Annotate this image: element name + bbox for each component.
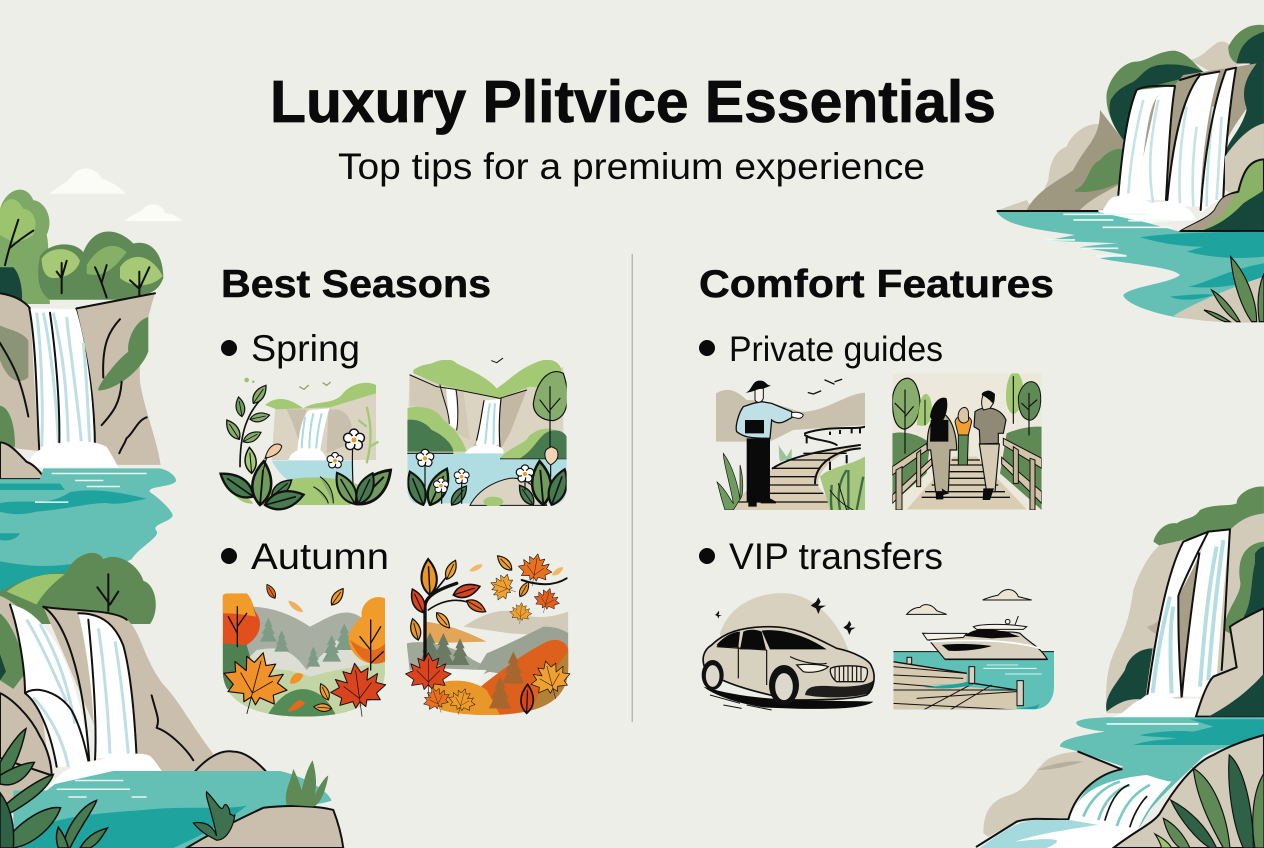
grass tuft left bbox=[286, 760, 328, 806]
right rocks bbox=[1225, 123, 1264, 197]
background rocks bbox=[1037, 124, 1120, 207]
list item: autumn: Autumn bbox=[251, 536, 389, 577]
lower cliff rock bbox=[0, 596, 268, 819]
waterfall rock bbox=[1167, 63, 1257, 193]
lower pool bbox=[13, 771, 332, 848]
foreground leaves bbox=[0, 729, 107, 848]
list item: vip transfers: VIP transfers bbox=[729, 536, 943, 577]
back rock bbox=[1106, 530, 1233, 713]
spring illustration one bbox=[216, 378, 398, 513]
lower waterfall bbox=[10, 605, 163, 786]
plant leaves bbox=[1204, 257, 1264, 322]
water plant bbox=[193, 792, 235, 840]
falls bbox=[1147, 532, 1208, 700]
private guide illustration bbox=[716, 379, 865, 510]
lake bbox=[0, 468, 176, 602]
dark shrub bbox=[1106, 648, 1153, 712]
scene: left waterfalls bbox=[0, 168, 343, 848]
spring illustration two bbox=[403, 358, 572, 509]
title: Luxury Plitvice Essentials bbox=[270, 69, 996, 135]
yacht and dock illustration bbox=[893, 590, 1054, 710]
autumn illustration one bbox=[222, 584, 386, 717]
group on boardwalk illustration bbox=[892, 372, 1042, 510]
right foreground bank bbox=[1181, 159, 1264, 231]
list item: private guides: Private guides bbox=[729, 330, 943, 369]
subtitle: Top tips for a premium experience bbox=[338, 146, 925, 187]
right rock bbox=[1197, 513, 1264, 717]
autumn illustration two bbox=[405, 551, 575, 718]
cliff green and sand bbox=[997, 200, 1033, 211]
trees upper left bbox=[0, 190, 163, 304]
upper cliff rock bbox=[0, 293, 161, 465]
illustrations: spring and autumn bbox=[215, 358, 575, 722]
lower cascade bbox=[1070, 775, 1172, 833]
sand and plant bbox=[1173, 277, 1264, 323]
canopy bbox=[1106, 51, 1203, 140]
foam bbox=[1112, 692, 1200, 717]
clouds bbox=[49, 168, 183, 221]
scene: bottom right waterfall bbox=[977, 486, 1264, 848]
right foreground bank bbox=[1113, 735, 1264, 848]
upper waterfall bbox=[29, 308, 118, 467]
heading: comfort features: Comfort Features bbox=[699, 263, 1054, 306]
plant leaves bbox=[1155, 755, 1264, 848]
river bbox=[1060, 717, 1264, 827]
divider bbox=[632, 254, 633, 722]
right foreground rock bbox=[1196, 608, 1264, 717]
luxury car illustration bbox=[702, 593, 874, 710]
list item: spring: Spring bbox=[251, 328, 360, 369]
upper left boulder bbox=[0, 442, 44, 479]
foam bbox=[1098, 195, 1197, 223]
rock bottom right bbox=[187, 806, 343, 848]
river bbox=[997, 212, 1264, 319]
canopy top bbox=[1153, 486, 1264, 546]
mid rock bbox=[983, 752, 1122, 837]
illustrations: comfort features bbox=[702, 372, 1054, 710]
heading: best seasons: Best Seasons bbox=[221, 263, 491, 306]
scene: top right waterfall bbox=[997, 25, 1264, 323]
waterfalls bbox=[1118, 86, 1175, 200]
lower trees bbox=[0, 553, 156, 624]
